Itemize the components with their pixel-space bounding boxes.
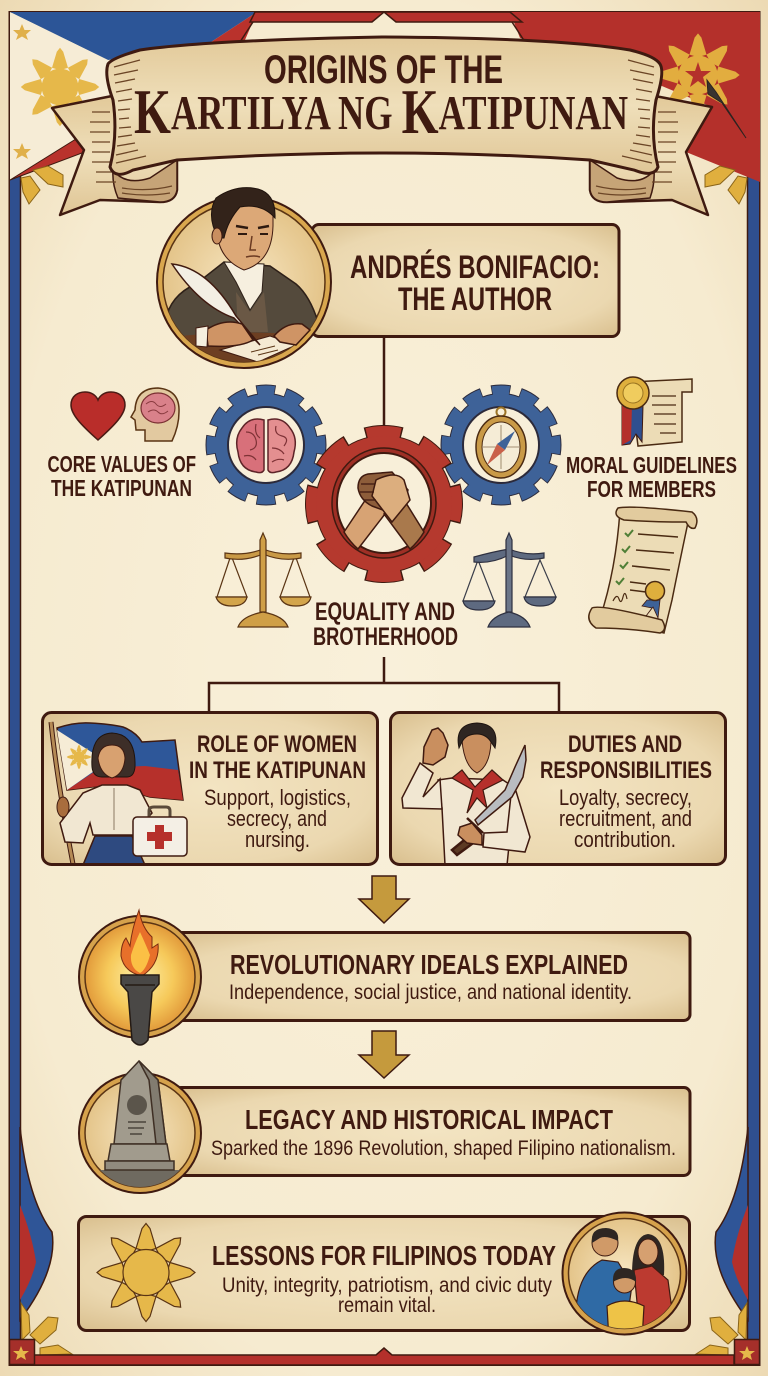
medallion: family [562,1212,688,1340]
medallion: torch [78,910,202,1045]
banner right roll [590,160,654,202]
flag [57,723,183,800]
panel: role of women [42,712,378,865]
icon: left flag star top [13,24,31,40]
icon: clasped hands [344,472,424,549]
heading: lessons: LESSONS FOR FILIPINOS TODAY [212,1240,556,1271]
icon: slate scales [463,533,556,627]
right flag corner [510,12,760,182]
shirt body [438,778,515,865]
flagpole [51,722,73,864]
icon: bottom corner sun left [21,1303,72,1355]
medallion: monument [78,1061,202,1195]
head [462,733,491,773]
hair [92,733,135,777]
icon: corner sun right [705,166,747,204]
connector: branch to two cards [209,657,559,712]
corner star: right [734,1340,760,1364]
resting hand [274,324,310,345]
gear: brain [212,391,320,499]
gear: compass [447,391,555,499]
banner left tail [52,96,177,215]
left flag corner [10,12,257,180]
heading: core values: CORE VALUES OF [48,451,196,477]
icon: certificate with medal [617,377,692,446]
title line 2: K [134,76,171,147]
heading: moral guidelines: FOR MEMBERS [587,476,716,502]
heading: moral guidelines [566,452,737,502]
banner left roll [113,160,177,202]
raised hand [423,728,448,765]
ground [100,1170,180,1187]
heading: equality and brotherhood: EQUALITY AND [315,598,455,626]
panel: lessons for Filipinos today [78,1216,690,1330]
icon: obelisk [105,1061,174,1170]
bolo blade [475,745,526,825]
bottom border bar [34,1348,734,1365]
gripping hand [458,823,482,845]
heading: role of women: ROLE OF WOMEN [197,731,357,758]
heading: duties: RESPONSIBILITIES [540,757,712,784]
icon: philippine sun [97,1224,195,1322]
panel: duties and responsibilities [390,712,726,865]
heading: core values [48,451,196,501]
heading: author: ANDRÉS BONIFACIO: [350,249,600,285]
face [98,745,125,778]
panel: revolutionary ideals [175,932,690,1020]
red scarf [452,770,503,813]
heading: duties [540,731,712,784]
icon: checklist scroll [589,507,697,633]
icon: flame [121,910,158,976]
icon: brain [237,419,295,473]
heading: revolutionary ideals: REVOLUTIONARY IDEALS EXPLAINED [230,949,628,980]
bolo handle [452,818,483,855]
hand [57,797,69,817]
text: lessons description: Unity, integrity, patriotism, and civic duty [222,1274,552,1297]
title line 2: ARTILYA NG [171,85,402,140]
heading: legacy: LEGACY AND HISTORICAL IMPACT [245,1104,613,1135]
icon: gold scales [216,533,311,627]
title line 2: K [402,76,439,147]
icon: left flag star bottom [13,143,31,159]
connector: author to gears [383,335,385,430]
text: role of women description: secrecy, and [227,806,327,831]
hair [458,723,496,748]
text: lessons description [222,1274,552,1317]
arrow: down 1 [359,876,409,923]
text: role of women description: Support, logistics, [204,785,351,810]
portrait: Bonifacio writing [150,188,332,380]
top border bar [240,12,525,42]
icon: heart [71,392,125,440]
heading: core values: THE KATIPUNAN [51,475,192,501]
banner right tail [590,96,712,215]
feather quill [172,264,260,345]
text: lessons description: remain vital. [338,1294,436,1317]
title banner [52,37,712,215]
text: role of women description: nursing. [245,827,310,852]
heading: role of women [189,731,366,784]
text: duties description [559,785,692,852]
medical kit [133,807,187,856]
heading: duties: DUTIES AND [568,731,682,758]
corner ribbon: right [715,1127,748,1320]
text: duties description: contribution. [574,827,676,852]
text: revolutionary ideals description: Independence, social justice, and national identity. [229,981,632,1004]
father [576,1260,632,1335]
icon: right flag sun [656,33,740,117]
icon: head with brain [131,388,179,441]
mother [632,1234,664,1275]
raised arm [402,763,442,809]
heading: role of women: IN THE KATIPUNAN [189,757,366,784]
gear: handshake [313,433,455,575]
heading: equality and brotherhood: BROTHERHOOD [313,623,458,651]
text: duties description: Loyalty, secrecy, [559,785,692,810]
skirt [83,836,145,865]
text: legacy description: Sparked the 1896 Revolution, shaped Filipino nationalism. [211,1137,676,1160]
panel: Andres Bonifacio author [312,224,619,336]
head [217,204,273,270]
corner ribbon: left [20,1127,53,1320]
blouse [60,785,152,843]
icon: compass [476,408,526,478]
corner star: left [10,1340,34,1364]
lower arm [483,786,530,852]
icon: corner sun left [21,166,63,204]
heading: equality and brotherhood [313,598,458,651]
illustration: man taking oath with bolo [402,723,530,865]
title line 1: ORIGINS OF THE [264,48,503,92]
icon: left flag sun [21,48,99,126]
heading: author line 2: THE AUTHOR [398,281,552,317]
title line 2: ATIPUNAN [439,85,628,140]
child [606,1300,645,1328]
text: duties description: recruitment, and [559,806,692,831]
icon: quill on flag [707,80,746,138]
icon: obelisk emblem [127,1095,147,1115]
icon: torch handle [121,975,159,1045]
illustration: woman with flag and medical kit [51,722,187,865]
writing hand [206,322,253,346]
panel: legacy and historical impact [175,1088,690,1176]
banner body [107,37,662,174]
text: role of women description [204,785,351,852]
arrow: down 2 [359,1031,409,1078]
icon: bottom corner sun right [696,1303,747,1355]
